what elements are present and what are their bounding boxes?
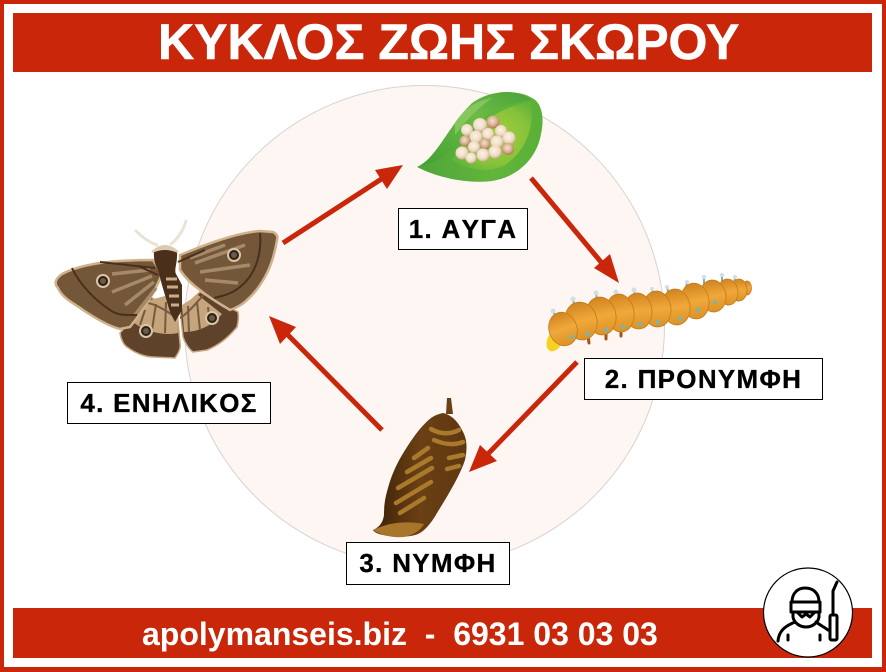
footer contact band: apolymanseis.biz - 6931 03 03 03 (142, 616, 658, 652)
arrow: adult to eggs (283, 165, 403, 243)
icon: leaf with eggs (417, 92, 543, 182)
arrow: eggs to larva (531, 178, 619, 283)
label: eggs: 1. ΑΥΓΑ (409, 214, 517, 244)
footer contact band (13, 608, 872, 658)
background circle (184, 85, 665, 567)
forewings (56, 260, 162, 329)
label: adult: 4. ΕΝΗΛΙΚΟΣ (80, 388, 258, 418)
antennae (136, 221, 186, 245)
arrow: pupa to adult (269, 316, 382, 430)
label: pupa (346, 542, 510, 585)
label: pupa: 3. ΝΥΜΦΗ (359, 548, 497, 578)
icon: pupa (373, 398, 467, 537)
title: ΚΥΚΛΟΣ ΖΩΗΣ ΣΚΩΡΟΥ (158, 14, 739, 70)
label: adult (67, 382, 271, 424)
label: larva: 2. ΠΡΟΝΥΜΦΗ (605, 364, 802, 394)
wing eyespots (97, 249, 240, 337)
label: eggs (398, 208, 528, 250)
label: larva (584, 358, 823, 400)
icon: moth (56, 221, 277, 358)
title (13, 13, 872, 72)
body (154, 246, 182, 322)
hind wings (120, 297, 180, 358)
logo badge: exterminator icon (762, 567, 854, 658)
icon: larva (543, 273, 752, 354)
arrow: larva to pupa (469, 362, 577, 472)
